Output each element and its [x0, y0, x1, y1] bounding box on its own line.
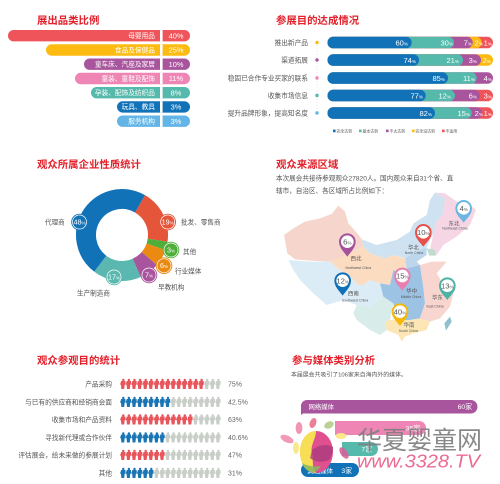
badge: manufacturers 17%: [106, 269, 122, 285]
donut labels: 批发、零售商: [181, 218, 221, 226]
heading: visit purpose: 观众参观目的统计: [37, 354, 121, 367]
bar: food and health 25%: [46, 44, 190, 56]
row: collect market information: 3%: [484, 91, 492, 100]
watermark logo: flower: [279, 417, 351, 473]
badge: early education 7%: 7%: [145, 270, 153, 280]
row: brand image: 82%: [419, 109, 432, 118]
bar: childrenswear 11%: 11%: [169, 74, 184, 83]
heading: exhibit categories: 展出品类比例: [37, 14, 99, 27]
watermark: site name: 华夏婴童网: [357, 427, 482, 455]
bar: trade media 36: 36家: [406, 424, 420, 432]
row: launch new products: 60%: [395, 38, 408, 47]
region labels: East China: [426, 304, 444, 308]
panel: visitor origin: [276, 158, 476, 342]
badge: industry media 6%: 6%: [160, 261, 168, 270]
row: collect market information: 77%: [410, 91, 423, 100]
region labels: 华北: [408, 243, 419, 251]
row: meet suppliers 42.5%: 与已有的供应商和经销商会面: [25, 397, 112, 406]
row: other 31%: 其他: [99, 468, 112, 477]
intro text: 本届展会共吸引了106家来自海内外的媒体。: [291, 370, 407, 378]
pin: north 10%: 10%: [417, 228, 430, 237]
row: strengthen buyer ties: 稳固已合作专业买家的联系: [228, 74, 308, 82]
row: collect market information: 6%: [469, 91, 477, 100]
intro text: 本次展会共接待参观观众27820人。国内观众来自31个省、直: [276, 174, 454, 182]
bar: food and health 25%: 25%: [169, 46, 184, 55]
panel: exhibit category share: [8, 14, 190, 127]
legend: achievement levels: [333, 128, 457, 133]
row: channel expansion: [281, 54, 493, 66]
bar: strollers 10%: [84, 58, 190, 70]
row: channel expansion: 渠道拓展: [281, 56, 308, 64]
donut labels: 生产制造商: [77, 288, 110, 298]
badge: other 3%: 3%: [167, 246, 175, 254]
bar: trade media 36: [335, 421, 426, 435]
bar: outdoor media 7: [342, 442, 378, 456]
row: market information 63%: 63%: [228, 417, 242, 424]
panel: visit purpose: [18, 354, 248, 478]
region labels: Northwest China: [345, 266, 371, 270]
bar: food and health 25%: 食品及保健品: [115, 45, 155, 54]
row: strengthen buyer ties: 11%: [463, 74, 475, 83]
row: brand image: 提升品牌形象，提高知名度: [228, 108, 308, 118]
bar: services 3%: 服务机构: [128, 116, 155, 126]
pin: central 15%: [394, 268, 411, 291]
region labels: 华南: [404, 321, 415, 329]
bar: childrenswear 11%: 童装、童鞋及配饰: [102, 74, 155, 83]
row: other 31%: 31%: [228, 470, 242, 478]
row: collect market information: 收集市场信息: [268, 91, 308, 100]
badge: manufacturers 17%: 17%: [108, 272, 120, 282]
row: launch new products: 30%: [440, 38, 453, 47]
bar: other media 3: 3家: [341, 466, 352, 475]
pin: north 10%: [415, 224, 432, 247]
region labels: 华中: [406, 287, 417, 295]
row: channel expansion: 2%: [483, 56, 491, 65]
row: brand image: [228, 107, 493, 119]
row: find new partners 40.6%: [45, 432, 248, 442]
row: channel expansion: 21%: [446, 56, 459, 65]
legend: achievement levels: 基本达到: [362, 128, 378, 133]
donut chart: [73, 186, 171, 284]
row: market information 63%: [52, 414, 242, 424]
row: find new partners 40.6%: 寻找新代理或合作伙伴: [45, 433, 112, 442]
region labels: 西北: [351, 254, 362, 262]
legend: achievement levels: 完全没达到: [416, 128, 435, 133]
region labels: Middle China: [401, 295, 421, 299]
pin: south 40%: 40%: [394, 307, 406, 316]
bar: toys 3%: 玩具、教具: [122, 102, 155, 111]
row: purchasing 75%: [85, 379, 242, 389]
pin: northeast 4%: [455, 200, 472, 223]
donut labels: 早教机构: [158, 282, 185, 292]
row: other 31%: [99, 468, 242, 478]
row: evaluate exhibition 47%: 评估展会，给未来做的参展计划: [18, 450, 112, 459]
intro text: 辖市，自治区、各区域所占比例如下：: [276, 186, 388, 195]
donut labels: 代理商: [45, 218, 65, 226]
bar: maternity 8%: [91, 87, 190, 98]
badge: early education 7%: [141, 267, 157, 283]
bar: maternal products 40%: 40%: [169, 31, 184, 40]
bar: maternity 8%: 8%: [171, 88, 182, 97]
badge: agents 48%: [71, 214, 88, 230]
legend: achievement levels: 完全达到: [336, 128, 352, 133]
bar: online media 60: [301, 400, 477, 415]
row: meet suppliers 42.5%: [25, 397, 248, 407]
badge: wholesale retail 19%: [159, 214, 176, 230]
bar: services 3%: 3%: [171, 117, 182, 126]
donut labels: [45, 218, 221, 298]
region labels: 东北: [449, 219, 460, 227]
legend: achievement levels: 不适用: [446, 128, 457, 133]
row: launch new products: [275, 37, 493, 48]
badge: wholesale retail 19%: 19%: [162, 218, 174, 226]
row: brand image: 2%: [475, 109, 483, 118]
donut labels: 行业媒体: [175, 266, 202, 276]
heading: visitor origin: 观众来源区域: [276, 158, 339, 171]
region labels: Southwest China: [342, 298, 368, 302]
row: evaluate exhibition 47%: [18, 450, 242, 460]
heading: goals achieved: 参展目的达成情况: [276, 14, 360, 27]
row: brand image: 15%: [457, 109, 470, 118]
heading: company types: 观众所属企业性质统计: [37, 158, 142, 171]
row: channel expansion: 74%: [403, 56, 416, 65]
pin: southwest 12%: 12%: [336, 276, 349, 285]
legend: achievement levels: 不太达到: [390, 128, 405, 133]
panel: exhibit goals achieved: [228, 14, 493, 133]
region labels: 华东: [432, 294, 443, 302]
panel: media categories: [291, 354, 477, 477]
row: market information 63%: 收集市场和产品资料: [52, 415, 112, 424]
row: launch new products: 7%: [464, 38, 472, 47]
pin: east 13%: [439, 277, 456, 300]
badge: other 3%: [163, 242, 179, 258]
region labels: Northeast China: [442, 227, 468, 231]
row: channel expansion: 3%: [469, 56, 477, 65]
row: strengthen buyer ties: 85%: [432, 74, 445, 83]
row: meet suppliers 42.5%: 42.5%: [228, 400, 248, 406]
watermark: site url: www.3328.TV: [357, 452, 482, 472]
panel: visitor company types: [37, 158, 221, 298]
row: launch new products: 2%: [475, 38, 483, 47]
pin: northeast 4%: 4%: [459, 204, 468, 213]
row: launch new products: 推出新产品: [275, 38, 308, 47]
bar: online media 60: 网络媒体: [308, 402, 335, 411]
region labels: North China: [405, 251, 423, 255]
row: launch new products: 1%: [484, 38, 492, 47]
bar: maternal products 40%: [8, 30, 190, 41]
bar: online media 60: 60家: [458, 402, 472, 411]
badge: agents 48%: 48%: [73, 218, 86, 226]
bar: strollers 10%: 10%: [169, 60, 184, 69]
row: collect market information: 12%: [438, 91, 451, 100]
row: brand image: 1%: [484, 109, 492, 118]
pin: central 15%: 15%: [396, 272, 409, 281]
badge: industry media 6%: [156, 257, 172, 274]
bar: strollers 10%: 童车床、汽座及家居: [95, 60, 155, 68]
row: find new partners 40.6%: 40.6%: [228, 435, 248, 442]
region labels: South China: [399, 329, 418, 333]
row: collect market information: [268, 90, 493, 101]
heading: media categories: 参与媒体类别分析: [292, 354, 376, 367]
pin: northwest 6%: 6%: [343, 237, 352, 246]
map of China: [284, 193, 476, 342]
bar: services 3%: [117, 116, 190, 127]
row: purchasing 75%: 产品采购: [85, 379, 112, 388]
donut labels: 其他: [183, 247, 197, 256]
pin: southwest 12%: [334, 272, 351, 296]
bar: toys 3%: [117, 101, 190, 113]
bar: outdoor media 7: 7家: [361, 444, 372, 454]
pin: south 40%: [392, 303, 408, 326]
region labels: [342, 219, 468, 333]
bar: childrenswear 11%: [75, 73, 190, 84]
pin: east 13%: 13%: [441, 281, 454, 290]
row: purchasing 75%: 75%: [228, 382, 242, 388]
row: strengthen buyer ties: 4%: [484, 74, 492, 83]
bar: maternity 8%: 孕装、配饰及纺织品: [95, 88, 155, 97]
region labels: 西南: [348, 289, 359, 297]
row: evaluate exhibition 47%: 47%: [228, 452, 242, 460]
row: strengthen buyer ties: [228, 72, 493, 84]
bar: other media 3: 其他媒体: [308, 466, 334, 475]
bar: maternal products 40%: 母婴用品: [128, 32, 155, 40]
pin: northwest 6%: [339, 233, 356, 257]
bar: other media 3: [301, 463, 359, 477]
bar: toys 3%: 3%: [171, 102, 182, 112]
